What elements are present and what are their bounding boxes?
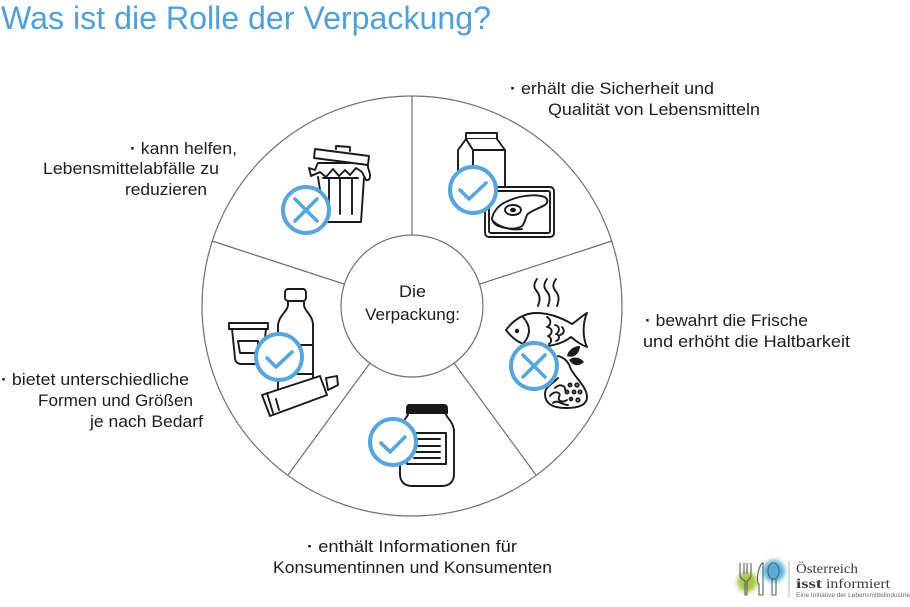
center label (365, 282, 460, 324)
check badge (450, 167, 496, 213)
logo: Österreich (796, 561, 858, 576)
cross badge (283, 187, 329, 233)
text: Sicherheit und Qualitaet: Qualität von Lebensmitteln (548, 100, 760, 119)
title: Was ist die Rolle der Verpackung? (1, 0, 491, 36)
center label: Die (399, 282, 426, 301)
icon: trash can with cross (283, 146, 370, 233)
text: Frische und Haltbarkeit: · bewahrt die Frische (645, 311, 808, 330)
wheel diagram (202, 96, 622, 516)
logo: isst (796, 577, 822, 592)
text: Formen und Groessen: je nach Bedarf (89, 412, 203, 431)
text: Formen und Groessen: · bietet unterschiedliche (1, 370, 189, 389)
text: Lebensmittelabfaelle: · kann helfen, (130, 139, 237, 158)
logo (737, 560, 910, 599)
text: Lebensmittelabfaelle: reduzieren (125, 180, 207, 199)
text: Frische und Haltbarkeit: und erhöht die Haltbarkeit (643, 332, 850, 351)
logo: Eine Initiative der Lebensmittelindustrie (796, 592, 910, 599)
logo: informiert (826, 576, 890, 591)
text: Formen und Groessen: Formen und Größen (38, 391, 193, 410)
icon: containers and tube with check (229, 289, 338, 416)
text: Informationen: Konsumentinnen und Konsumenten (273, 558, 552, 577)
center label: Verpackung: (365, 305, 460, 324)
check badge (370, 419, 416, 465)
text: Informationen: · enthält Informationen für (307, 537, 517, 556)
icon: fish and pear with cross (506, 279, 587, 408)
text: Sicherheit und Qualitaet: · erhält die Sicherheit und (510, 79, 714, 98)
text: Frische und Haltbarkeit (643, 311, 850, 351)
cross badge (511, 343, 557, 389)
check badge (256, 334, 302, 380)
text: Lebensmittelabfaelle (43, 139, 237, 199)
icon: jar with label and check (370, 404, 454, 486)
text: Sicherheit und Qualitaet (510, 79, 760, 119)
text: Lebensmittelabfaelle: Lebensmittelabfälle zu (43, 159, 219, 178)
text: Formen und Groessen (1, 370, 203, 431)
text: Informationen (273, 537, 552, 577)
icon: milk carton and meat tray with check (450, 133, 554, 237)
